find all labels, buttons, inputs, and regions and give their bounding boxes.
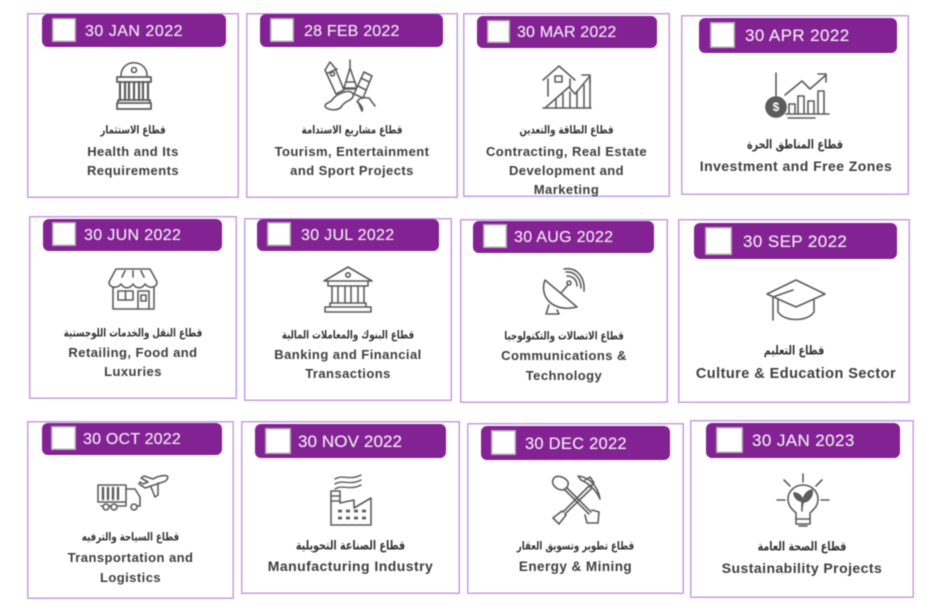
arabic label: قطاع التعليم xyxy=(764,344,824,358)
date: 30 AUG 2022 xyxy=(514,229,613,246)
date header xyxy=(699,18,897,53)
date: 30 NOV 2022 xyxy=(298,432,402,451)
checkbox xyxy=(716,427,743,453)
panel: 30 Aug 2022 xyxy=(460,219,668,403)
checkbox xyxy=(483,224,507,248)
icon: investment chart xyxy=(764,72,830,120)
icon: domed building xyxy=(115,61,153,111)
icon: shovel and pickaxe xyxy=(551,474,602,526)
date: 30 APR 2022 xyxy=(745,26,850,45)
sector name line 1: Tourism, Entertainment xyxy=(275,144,429,159)
arabic label: قطاع السياحة والترفيه xyxy=(82,531,179,544)
checkbox xyxy=(51,426,76,450)
checkbox xyxy=(52,222,76,246)
sector name line 2: Transactions xyxy=(305,366,391,381)
date header xyxy=(42,14,226,47)
icon: light bulb with leaves xyxy=(776,472,830,528)
sector name line 2: and Sport Projects xyxy=(290,163,414,178)
icon: satellite dish xyxy=(542,267,586,316)
arabic label: قطاع مشاريع الاستدامة xyxy=(302,124,402,137)
panel: 30 Mar 2022 xyxy=(463,13,670,197)
panel: 30 Jan 2022 xyxy=(27,13,239,198)
icon: factory xyxy=(329,474,372,526)
sector name: Energy & Mining xyxy=(519,559,632,574)
date: 30 JAN 2023 xyxy=(752,431,855,450)
date: 30 JUN 2022 xyxy=(84,227,181,244)
date: 30 DEC 2022 xyxy=(525,435,627,453)
sector name line 1: Transportation and xyxy=(68,550,193,565)
date header xyxy=(477,16,657,48)
date: 30 OCT 2022 xyxy=(83,431,181,448)
icon: house and growth chart xyxy=(542,64,592,110)
checkbox xyxy=(491,430,516,455)
sector name line 2: Luxuries xyxy=(104,364,162,379)
panel: 30 Nov 2022 xyxy=(241,421,460,594)
sector name line 1: Contracting, Real Estate xyxy=(486,144,647,159)
date header xyxy=(694,223,897,259)
checkbox xyxy=(705,227,732,255)
date: 30 MAR 2022 xyxy=(517,24,616,41)
sector name line 1: Retailing, Food and xyxy=(68,345,198,360)
sector name: Manufacturing Industry xyxy=(268,558,433,574)
date header xyxy=(257,219,439,251)
checkbox xyxy=(710,22,735,48)
checkbox xyxy=(52,18,76,42)
date: 28 FEB 2022 xyxy=(304,23,400,40)
sector name line 2: Requirements xyxy=(87,163,179,178)
panel: 30 Oct 2022 xyxy=(27,421,234,599)
sector name: Investment and Free Zones xyxy=(700,158,892,174)
sector name line 1: Banking and Financial xyxy=(274,347,422,362)
arabic label: قطاع المناطق الحرة xyxy=(747,138,843,152)
panel: 28 Feb 2022 xyxy=(246,13,458,198)
arabic label: قطاع الاستثمار xyxy=(100,124,166,137)
arabic label: قطاع الاتصالات والتكنولوجيا xyxy=(504,330,624,343)
date header xyxy=(255,424,446,458)
date header xyxy=(481,426,670,460)
panel: 30 Jun 2022 xyxy=(29,216,237,399)
checkbox xyxy=(487,20,510,43)
arabic label: قطاع النقل والخدمات اللوجستية xyxy=(64,327,202,340)
panel: 30 Jul 2022 xyxy=(244,218,452,401)
icon: bank xyxy=(322,266,374,314)
arabic label: قطاع البنوك والمعاملات المالية xyxy=(282,329,414,342)
sector name line 3: Marketing xyxy=(534,182,599,197)
date header xyxy=(42,423,222,455)
checkbox xyxy=(270,18,294,42)
checkbox xyxy=(267,222,291,246)
panel: 30 Apr 2022 xyxy=(681,15,909,195)
arabic label: قطاع تطوير وتسويق العقار xyxy=(517,540,634,553)
checkbox xyxy=(265,428,291,454)
arabic label: قطاع الصناعة التحويلية xyxy=(296,539,405,553)
icon: truck and plane xyxy=(96,474,170,512)
sector name: Sustainability Projects xyxy=(722,560,882,576)
sector name line 2: Development and xyxy=(509,163,624,178)
icon: investment chart: $ xyxy=(773,100,780,114)
date: 30 SEP 2022 xyxy=(743,232,847,251)
icon: world landmarks xyxy=(324,58,376,112)
panel: 30 Jan 2023 xyxy=(690,420,914,598)
icon: graduation cap xyxy=(766,278,826,322)
sector name line 1: Communications & xyxy=(501,348,627,363)
panel: 30 Sep 2022 xyxy=(678,219,910,403)
date: 30 JUL 2022 xyxy=(301,227,394,244)
arabic label: قطاع الصحة العامة xyxy=(758,540,846,554)
sector name line 2: Logistics xyxy=(100,570,161,585)
arabic label: قطاع الطاقة والتعدين xyxy=(519,124,614,137)
date header xyxy=(260,14,443,47)
sector name line 2: Technology xyxy=(526,368,602,383)
sector name line 1: Health and Its xyxy=(87,144,179,159)
date header xyxy=(473,221,654,253)
date header xyxy=(43,219,222,251)
date: 30 JAN 2022 xyxy=(85,23,183,40)
icon: storefront xyxy=(108,268,158,311)
panel: 30 Dec 2022 xyxy=(467,423,684,594)
date header xyxy=(706,423,900,458)
sector name: Culture & Education Sector xyxy=(696,366,896,382)
